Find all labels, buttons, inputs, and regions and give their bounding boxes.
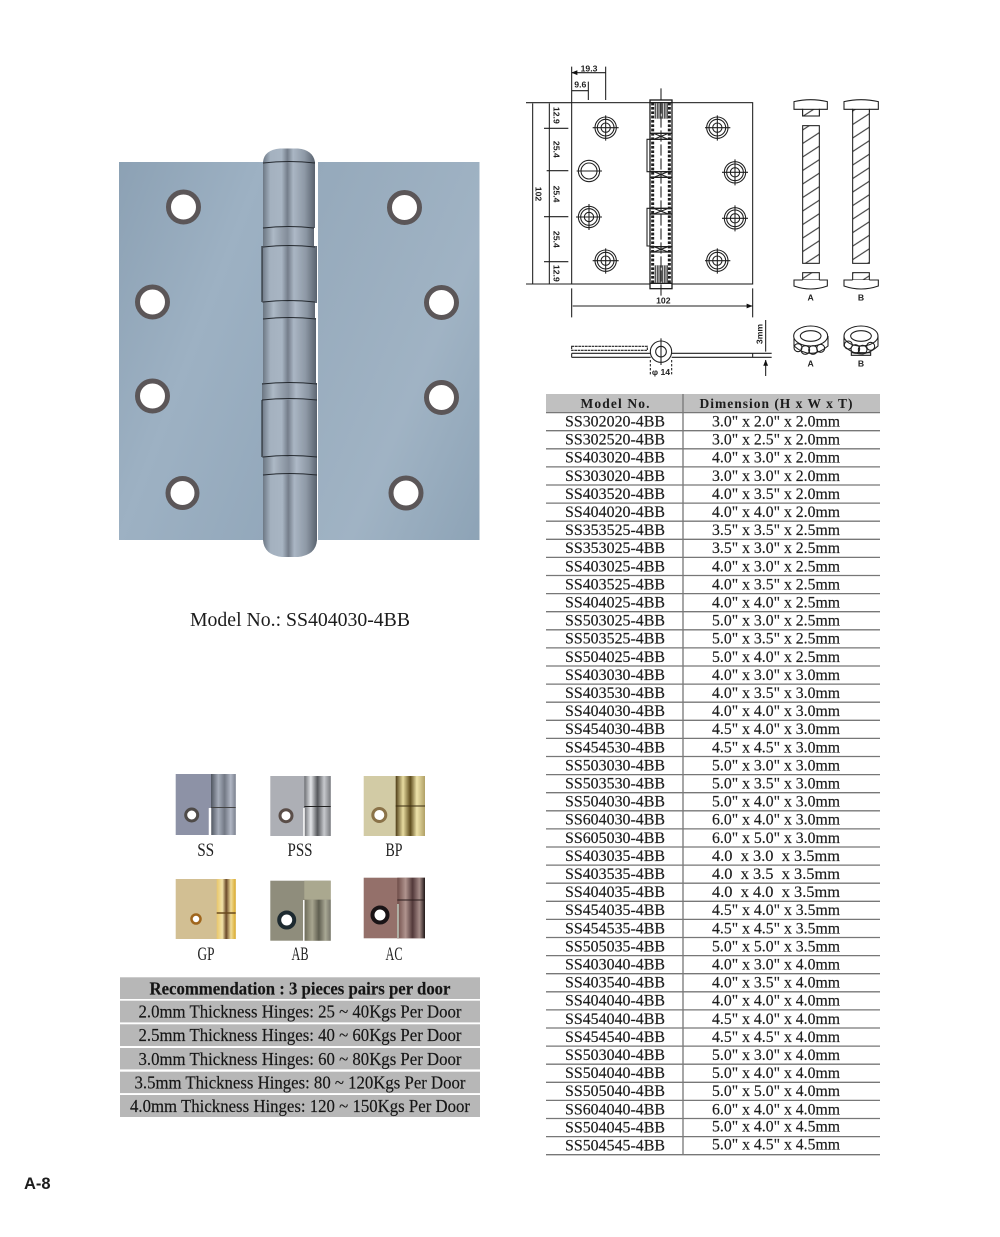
dimension lines: 12.9 xyxy=(551,107,561,124)
swatch: PSS: PSS xyxy=(288,840,312,861)
model numbers column: SS503030-4BB xyxy=(565,757,665,774)
model numbers column: SS404030-4BB xyxy=(565,703,665,720)
model numbers column: SS454040-4BB xyxy=(565,1011,665,1028)
dimensions column: 5.0" x 3.0" x 4.0mm xyxy=(712,1047,841,1064)
model numbers column: SS503025-4BB xyxy=(565,613,665,630)
model numbers column: SS404040-4BB xyxy=(565,993,665,1010)
side profile: φ 14 xyxy=(652,367,670,377)
dimension table xyxy=(546,394,880,1155)
dimension lines: 9.6 xyxy=(574,80,587,90)
dimensions column: 4.0" x 3.0" x 4.0mm xyxy=(712,956,841,974)
dimensions column: 5.0" x 3.0" x 2.5mm xyxy=(712,613,841,630)
bearing B: B xyxy=(858,359,864,369)
model numbers column: SS404035-4BB xyxy=(565,884,665,901)
model numbers column: SS503525-4BB xyxy=(565,631,665,648)
model numbers column: SS403025-4BB xyxy=(565,558,665,575)
model numbers column: SS504030-4BB xyxy=(565,794,665,811)
swatch: GP: GP xyxy=(198,944,214,965)
dimensions column: 5.0" x 5.0" x 4.0mm xyxy=(712,1083,841,1100)
model numbers column: SS404020-4BB xyxy=(565,504,665,521)
table header: Model No. xyxy=(580,396,650,411)
model numbers column: SS302020-4BB xyxy=(565,414,665,430)
technical drawing xyxy=(526,63,878,377)
dimensions column: 4.0" x 3.5" x 3.0mm xyxy=(712,685,841,702)
bearing B xyxy=(844,326,878,369)
table header: Dimension (H x W x T) xyxy=(700,396,852,411)
dimensions column: 5.0" x 3.5" x 2.5mm xyxy=(712,631,841,648)
model numbers column: SS505040-4BB xyxy=(565,1083,665,1100)
model numbers column: SS454530-4BB xyxy=(565,739,665,756)
dimensions column: 4.5" x 4.5" x 3.5mm xyxy=(712,920,841,937)
model numbers column: SS505035-4BB xyxy=(565,938,665,955)
swatch: AB xyxy=(270,881,331,965)
dimension lines: 102 xyxy=(656,296,671,306)
model numbers column: SS404025-4BB xyxy=(565,594,665,612)
dimensions column: 6.0" x 5.0" x 3.0mm xyxy=(712,830,841,847)
dimensions column: 3.5" x 3.0" x 2.5mm xyxy=(712,540,841,557)
dimensions column: 4.5" x 4.5" x 3.0mm xyxy=(712,739,841,756)
dimensions column: 4.0 x 3.0 x 3.5mm xyxy=(712,848,841,865)
page number: A-8 xyxy=(24,1175,51,1193)
model caption: Model No.: SS404030-4BB xyxy=(190,609,410,631)
screw B xyxy=(844,100,878,303)
screw B: B xyxy=(858,293,864,303)
swatch: BP xyxy=(364,776,425,861)
model numbers column: SS403540-4BB xyxy=(565,975,665,992)
row 3.0mm: 3.0mm Thickness Hinges: 60 ~ 80Kgs Per Door xyxy=(138,1049,462,1069)
hinge photo xyxy=(119,148,480,557)
dimensions column: 6.0" x 4.0" x 3.0mm xyxy=(712,812,841,829)
dimension lines: 25.4 xyxy=(551,231,561,248)
knuckle barrel xyxy=(262,148,317,557)
dimensions column: 5.0" x 4.0" x 2.5mm xyxy=(712,649,841,666)
model numbers column: SS403020-4BB xyxy=(565,450,665,467)
model numbers column: SS604030-4BB xyxy=(565,812,665,829)
model numbers column: SS503040-4BB xyxy=(565,1047,665,1064)
dimension lines: 12.9 xyxy=(551,265,561,282)
dimensions column: 5.0" x 4.0" x 3.0mm xyxy=(712,794,841,811)
dimensions column: 4.0" x 3.5" x 2.0mm xyxy=(712,486,841,503)
dimensions column xyxy=(712,414,841,1154)
dimensions column: 4.5" x 4.0" x 4.0mm xyxy=(712,1011,841,1028)
bearing A xyxy=(794,326,828,369)
row 4.0mm: 4.0mm Thickness Hinges: 120 ~ 150Kgs Per Door xyxy=(130,1096,470,1116)
dimensions column: 4.0" x 3.0" x 2.5mm xyxy=(712,558,841,575)
row 2.0mm: 2.0mm Thickness Hinges: 25 ~ 40Kgs Per Door xyxy=(138,1002,462,1022)
swatch: SS: SS xyxy=(197,840,214,861)
swatch: AC xyxy=(364,878,425,965)
dimensions column: 5.0" x 5.0" x 3.5mm xyxy=(712,938,841,955)
swatch: PSS xyxy=(270,776,331,861)
row 3.5mm: 3.5mm Thickness Hinges: 80 ~ 120Kgs Per Door xyxy=(134,1072,466,1092)
swatch: AC: AC xyxy=(386,944,402,965)
drawing screw holes xyxy=(576,115,748,274)
swatch: BP: BP xyxy=(386,840,402,861)
model numbers column: SS403535-4BB xyxy=(565,866,665,883)
model numbers column: SS605030-4BB xyxy=(565,830,665,847)
dimensions column: 5.0" x 3.5" x 3.0mm xyxy=(712,776,841,792)
swatch: AB: AB xyxy=(292,944,308,965)
swatch: GP xyxy=(176,879,236,965)
model numbers column: SS403040-4BB xyxy=(565,956,665,974)
dimensions column: 4.0" x 3.0" x 3.0mm xyxy=(712,667,841,684)
side profile xyxy=(572,320,772,377)
model numbers column: SS604040-4BB xyxy=(565,1101,665,1118)
model numbers column: SS302520-4BB xyxy=(565,432,665,449)
dimensions column: 4.5" x 4.5" x 4.0mm xyxy=(712,1029,841,1046)
model numbers column: SS403030-4BB xyxy=(565,667,665,684)
dimensions column: 4.0" x 4.0" x 4.0mm xyxy=(712,993,841,1010)
dimensions column: 5.0" x 4.5" x 4.5mm xyxy=(712,1136,841,1154)
swatch: SS xyxy=(176,774,236,861)
model numbers column: SS454535-4BB xyxy=(565,920,665,937)
bearing A: A xyxy=(808,359,815,369)
dimension lines: 25.4 xyxy=(551,186,561,203)
model numbers column: SS504045-4BB xyxy=(565,1119,665,1136)
row 2.5mm: 2.5mm Thickness Hinges: 40 ~ 60Kgs Per Door xyxy=(138,1025,462,1045)
dimensions column: 4.0" x 3.0" x 2.0mm xyxy=(712,450,841,467)
dimensions column: 5.0" x 4.0" x 4.0mm xyxy=(712,1065,841,1082)
screw A: A xyxy=(808,293,815,303)
model numbers column: SS353525-4BB xyxy=(565,522,665,539)
dimensions column: 4.5" x 4.0" x 3.0mm xyxy=(712,721,841,738)
dimensions column: 5.0" x 4.0" x 4.5mm xyxy=(712,1118,841,1136)
dimensions column: 4.5" x 4.0" x 3.5mm xyxy=(712,902,841,919)
dimensions column: 4.0" x 4.0" x 2.5mm xyxy=(712,594,841,612)
model numbers column xyxy=(565,414,665,1154)
screw holes xyxy=(138,192,456,508)
recommendation heading: Recommendation : 3 pieces pairs per door xyxy=(150,978,451,998)
table header xyxy=(546,394,880,413)
side profile: 3mm xyxy=(754,324,764,344)
model numbers column: SS454030-4BB xyxy=(565,721,665,738)
model numbers column: SS504545-4BB xyxy=(565,1138,665,1154)
model numbers column: SS403520-4BB xyxy=(565,486,665,503)
recommendation table xyxy=(120,977,480,1117)
dimensions column: 4.0" x 3.5" x 2.5mm xyxy=(712,576,841,593)
dimensions column: 3.0" x 2.0" x 2.0mm xyxy=(712,414,841,430)
dimensions column: 3.0" x 2.5" x 2.0mm xyxy=(712,432,841,449)
dimensions column: 4.0" x 4.0" x 2.0mm xyxy=(712,504,841,521)
drawing knuckle xyxy=(647,88,672,297)
dimensions column: 4.0 x 3.5 x 3.5mm xyxy=(712,866,841,883)
finish swatches xyxy=(176,774,425,965)
dimensions column: 5.0" x 3.0" x 3.0mm xyxy=(712,757,841,774)
model numbers column: SS303020-4BB xyxy=(565,468,665,485)
dimensions column: 4.0" x 3.5" x 4.0mm xyxy=(712,975,841,992)
dimensions column: 6.0" x 4.0" x 4.0mm xyxy=(712,1101,841,1118)
model numbers column: SS403525-4BB xyxy=(565,576,665,593)
model numbers column: SS403530-4BB xyxy=(565,685,665,702)
model numbers column: SS504040-4BB xyxy=(565,1065,665,1082)
right leaf xyxy=(318,162,480,540)
dimension lines: 25.4 xyxy=(551,141,561,158)
dimensions column: 3.5" x 3.5" x 2.5mm xyxy=(712,522,841,539)
dimension lines xyxy=(526,63,753,317)
model numbers column: SS504025-4BB xyxy=(565,649,665,666)
dimension lines: 102 xyxy=(534,187,544,201)
dimensions column: 3.0" x 3.0" x 2.0mm xyxy=(712,468,841,485)
model numbers column: SS353025-4BB xyxy=(565,540,665,557)
dimensions column: 4.0 x 4.0 x 3.5mm xyxy=(712,884,841,901)
left leaf xyxy=(119,162,263,540)
model numbers column: SS403035-4BB xyxy=(565,848,665,865)
dimensions column: 4.0" x 4.0" x 3.0mm xyxy=(712,703,841,720)
model numbers column: SS454035-4BB xyxy=(565,902,665,919)
model numbers column: SS454540-4BB xyxy=(565,1029,665,1046)
dimension lines: 19.3 xyxy=(581,63,598,73)
model numbers column: SS503530-4BB xyxy=(565,776,665,792)
screw A xyxy=(794,100,827,303)
